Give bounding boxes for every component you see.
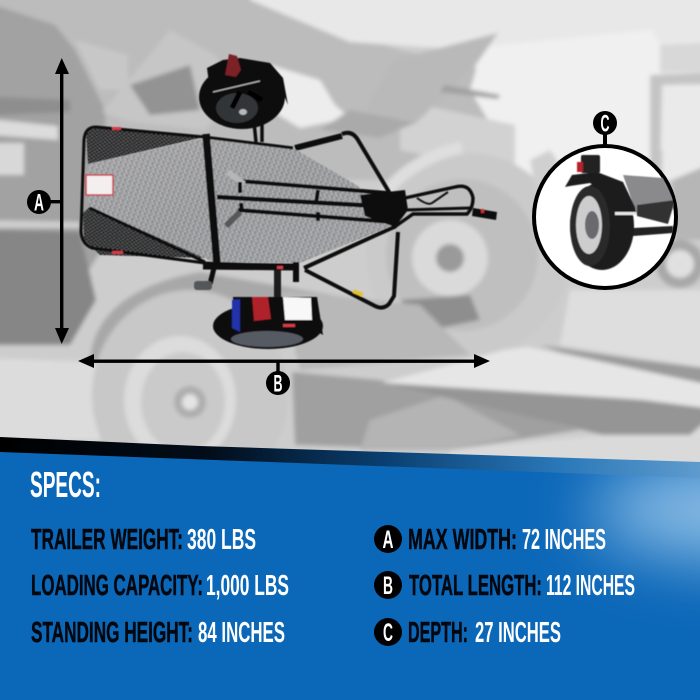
ground left [0,358,100,440]
lower car grille [0,230,96,345]
callout badge C [593,110,617,138]
background base fill [0,0,700,480]
bottom wheel assembly [213,297,323,349]
under trailer shadow [292,372,580,450]
crossbar [206,134,217,264]
building wall [470,30,662,190]
ramp deck [382,347,700,410]
wheel and fender photo [565,155,675,270]
ground right [560,290,700,370]
callout badge A: A [34,190,44,216]
large trailer tyre [92,290,288,500]
tree behind inset [530,150,570,210]
badge A in spec list: A [382,526,394,554]
car light stripe [0,118,58,140]
car plate [0,143,24,175]
callout badge B [266,370,290,398]
trailer fender [90,272,360,365]
sticker [86,175,113,195]
callout A connector [47,200,61,203]
car window [75,40,128,90]
building column [650,72,700,170]
trailer product image, top view [81,54,497,349]
stem and jack lower [194,262,299,298]
motorcycle tail [365,33,498,122]
callout B connector [276,361,280,373]
hitch tongue [393,186,473,228]
rear hitch coupler [472,208,497,220]
arrow A: vertical dimension [55,58,69,344]
spec: trailer weight: TRAILER WEIGHT: [31,524,183,556]
spec: loading capacity: 1,000 LBS [206,570,289,602]
callout badge B: B [274,370,282,398]
yellow reflector [353,289,363,297]
car lower strip [0,220,80,228]
spec: standing height: 84 INCHES [198,617,285,649]
mesh rear top [86,127,204,164]
mesh rear bottom [83,205,205,258]
fork arms [295,133,398,308]
ground bottom right [450,410,700,480]
spec: loading capacity: LOADING CAPACITY: [31,570,203,602]
bottom blue panel [0,437,700,700]
spec: trailer weight: 380 LBS [187,524,256,556]
car body [0,0,108,300]
spec: max width: MAX WIDTH: [408,524,517,556]
badge A in spec list [374,525,402,554]
badge C in spec list: C [383,619,393,647]
sky [250,0,700,150]
heading: specs: SPECS: [30,464,101,505]
badge B in spec list [374,571,402,600]
deck ramp rails [217,172,395,226]
badge B in spec list: B [383,572,393,600]
axle bar [203,266,298,267]
garage wall [0,0,500,180]
spec: max width: 72 INCHES [522,524,606,556]
spec: depth: DEPTH: [408,617,468,649]
bike rear tyre [366,153,570,357]
badge C in spec list [374,618,402,647]
frame outline [81,127,297,266]
tread plate deck [85,138,392,263]
motorcycle fairing [102,30,240,130]
callout badge A [27,190,51,216]
background photo: motorcycle on trailer (greyscale) [0,0,700,500]
red reflectors [112,127,283,269]
spec: depth: 27 INCHES [475,617,561,649]
callout C connector [603,130,607,146]
right background motorbike [656,240,700,288]
top wheel assembly [199,54,288,142]
car dark stripe [0,96,70,116]
callout badge C: C [600,110,610,138]
spec: total length: TOTAL LENGTH: [409,570,542,602]
inset detail circle C [534,146,676,288]
balcony [400,100,515,175]
arrow B: horizontal dimension [78,354,490,368]
spec: standing height: STANDING HEIGHT: [31,617,193,649]
building roof edge [660,42,700,72]
bike fender [385,148,462,195]
hitch assembly [360,190,408,227]
ramp mesh [384,383,700,435]
